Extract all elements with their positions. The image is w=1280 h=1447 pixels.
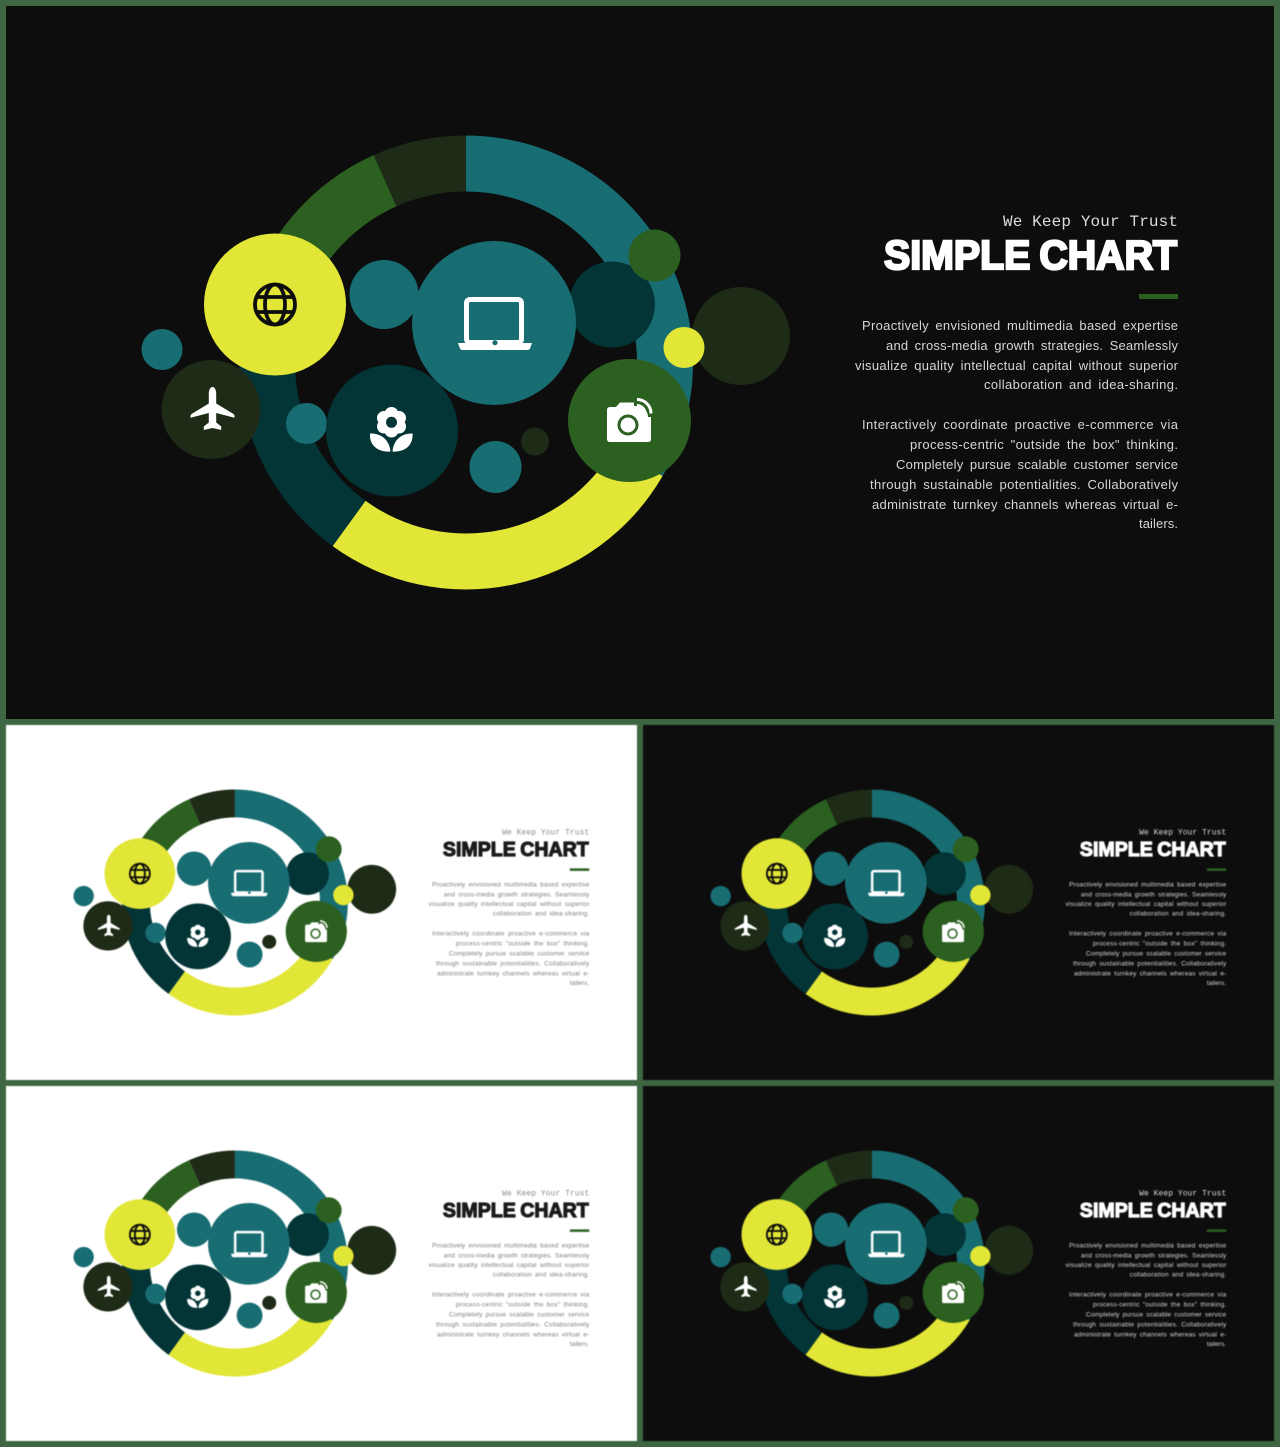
paragraph 1: visualize quality intellectual capital without superior xyxy=(1065,1262,1227,1269)
paragraph 2: process-centric "outside the box" thinking. xyxy=(1093,1302,1226,1309)
paragraph 2: Interactively coordinate proactive e-commerce via xyxy=(1069,1292,1227,1299)
paragraph 1: and cross-media growth strategies. Seamlessly xyxy=(444,1252,590,1259)
paragraph 1: and cross-media growth strategies. Seamlessly xyxy=(886,338,1178,353)
paragraph 2: process-centric "outside the box" thinking. xyxy=(910,437,1178,452)
paragraph 2: Interactively coordinate proactive e-commerce via xyxy=(1069,931,1227,938)
paragraph 1: collaboration and idea-sharing. xyxy=(1130,1272,1226,1279)
paragraph 2: tailers. xyxy=(570,1341,589,1348)
paragraph 1: collaboration and idea-sharing. xyxy=(493,911,589,918)
accent rule xyxy=(1207,1229,1226,1232)
icon: flower on dark teal circle xyxy=(165,1264,231,1330)
icon: flower on dark teal circle xyxy=(802,903,868,969)
donut ring chart xyxy=(122,789,348,1016)
decorative circle cluster xyxy=(73,1197,396,1328)
paragraph 2: Completely pursue scalable customer service xyxy=(1086,1312,1227,1319)
title: SIMPLE CHART xyxy=(1080,1200,1226,1222)
icon: camera on green circle xyxy=(923,901,984,962)
paragraph 1: Proactively envisioned multimedia based expertise xyxy=(432,881,590,888)
paragraph 1: visualize quality intellectual capital without superior xyxy=(855,358,1179,373)
paragraph 2: administrate turnkey channels whereas virtual e- xyxy=(872,497,1178,512)
subtitle: We Keep Your Trust xyxy=(1139,829,1226,838)
paragraph 2: administrate turnkey channels whereas virtual e- xyxy=(437,970,589,977)
paragraph 2: administrate turnkey channels whereas virtual e- xyxy=(1074,970,1226,977)
paragraph 2: process-centric "outside the box" thinking. xyxy=(456,1302,589,1309)
paragraph 1: and cross-media growth strategies. Seamlessly xyxy=(1081,891,1227,898)
paragraph 2 xyxy=(1069,931,1227,987)
icon: camera on green circle xyxy=(286,901,347,962)
title: SIMPLE CHART xyxy=(443,1200,589,1222)
paragraph 2 xyxy=(1069,1292,1227,1348)
subtitle: We Keep Your Trust xyxy=(1139,1190,1226,1199)
decorative circle cluster xyxy=(73,836,396,967)
icon: globe on yellow circle xyxy=(105,1199,175,1270)
icon: plane on dark circle xyxy=(720,901,770,951)
paragraph 1: collaboration and idea-sharing. xyxy=(493,1272,589,1279)
title: SIMPLE CHART xyxy=(443,839,589,861)
paragraph 1: and cross-media growth strategies. Seamlessly xyxy=(444,891,590,898)
icon: laptop on teal circle xyxy=(845,1203,927,1285)
paragraph 2: Interactively coordinate proactive e-commerce via xyxy=(432,931,590,938)
icon: camera on green circle xyxy=(286,1262,347,1323)
paragraph 2 xyxy=(432,1292,590,1348)
subtitle: We Keep Your Trust xyxy=(1003,213,1178,231)
paragraph 2: tailers. xyxy=(1139,516,1178,531)
paragraph 1 xyxy=(428,1242,590,1279)
slide 4: small white chart, bottom row xyxy=(6,1086,637,1441)
paragraph 2: process-centric "outside the box" thinking. xyxy=(456,941,589,948)
paragraph 2: tailers. xyxy=(570,980,589,987)
paragraph 2: process-centric "outside the box" thinking. xyxy=(1093,941,1226,948)
paragraph 1 xyxy=(1065,881,1227,918)
paragraph 2: through sustainable potentialities. Collaboratively xyxy=(1073,1321,1227,1328)
paragraph 2: administrate turnkey channels whereas virtual e- xyxy=(437,1331,589,1338)
paragraph 2: through sustainable potentialities. Collaboratively xyxy=(436,1321,590,1328)
accent rule xyxy=(570,868,589,871)
donut ring chart xyxy=(759,789,985,1016)
decorative circle cluster xyxy=(142,230,790,493)
title: SIMPLE CHART xyxy=(1080,839,1226,861)
paragraph 1 xyxy=(1065,1242,1227,1279)
paragraph 1: visualize quality intellectual capital without superior xyxy=(1065,901,1227,908)
paragraph 1 xyxy=(855,318,1179,392)
slide 3: small dark chart, middle row xyxy=(643,725,1274,1080)
paragraph 2: through sustainable potentialities. Collaboratively xyxy=(1073,960,1227,967)
icon: plane on dark circle xyxy=(83,1262,133,1312)
paragraph 2 xyxy=(862,417,1179,531)
paragraph 2 xyxy=(432,931,590,987)
accent rule xyxy=(570,1229,589,1232)
title: SIMPLE CHART xyxy=(884,232,1177,278)
paragraph 2: tailers. xyxy=(1207,1341,1226,1348)
icon: globe on yellow circle xyxy=(742,838,812,909)
paragraph 1: Proactively envisioned multimedia based expertise xyxy=(1069,1242,1227,1249)
donut ring chart xyxy=(239,136,693,589)
paragraph 2: Completely pursue scalable customer service xyxy=(449,951,590,958)
paragraph 2: Interactively coordinate proactive e-commerce via xyxy=(432,1292,590,1299)
icon: laptop on teal circle xyxy=(412,241,576,405)
paragraph 2: Interactively coordinate proactive e-commerce via xyxy=(862,417,1179,432)
decorative circle cluster xyxy=(710,1197,1033,1328)
donut ring chart xyxy=(759,1150,985,1377)
donut ring chart xyxy=(122,1150,348,1377)
icon: camera on green circle xyxy=(568,359,691,482)
icon: laptop on teal circle xyxy=(208,1203,290,1285)
paragraph 1: visualize quality intellectual capital without superior xyxy=(428,1262,590,1269)
paragraph 1: collaboration and idea-sharing. xyxy=(984,377,1178,392)
paragraph 1: Proactively envisioned multimedia based expertise xyxy=(1069,881,1227,888)
paragraph 1: Proactively envisioned multimedia based expertise xyxy=(862,318,1178,333)
slide 5: small dark chart, bottom row xyxy=(643,1086,1274,1441)
icon: globe on yellow circle xyxy=(105,838,175,909)
slide 1: large dark chart xyxy=(6,6,1274,719)
icon: flower on dark teal circle xyxy=(326,364,458,496)
paragraph 1: visualize quality intellectual capital without superior xyxy=(428,901,590,908)
paragraph 2: Completely pursue scalable customer service xyxy=(449,1312,590,1319)
icon: globe on yellow circle xyxy=(204,234,346,376)
icon: plane on dark circle xyxy=(162,360,260,459)
paragraph 2: Completely pursue scalable customer service xyxy=(1086,951,1227,958)
subtitle: We Keep Your Trust xyxy=(502,1190,589,1199)
accent rule xyxy=(1207,868,1226,871)
paragraph 1: and cross-media growth strategies. Seamlessly xyxy=(1081,1252,1227,1259)
accent rule xyxy=(1139,294,1178,299)
icon: plane on dark circle xyxy=(720,1262,770,1312)
icon: flower on dark teal circle xyxy=(165,903,231,969)
paragraph 1: Proactively envisioned multimedia based expertise xyxy=(432,1242,590,1249)
icon: flower on dark teal circle xyxy=(802,1264,868,1330)
paragraph 2: tailers. xyxy=(1207,980,1226,987)
subtitle: We Keep Your Trust xyxy=(502,829,589,838)
decorative circle cluster xyxy=(710,836,1033,967)
paragraph 1 xyxy=(428,881,590,918)
icon: globe on yellow circle xyxy=(742,1199,812,1270)
icon: camera on green circle xyxy=(923,1262,984,1323)
slide 2: small white chart, middle row xyxy=(6,725,637,1080)
icon: laptop on teal circle xyxy=(208,842,290,924)
paragraph 2: through sustainable potentialities. Collaboratively xyxy=(436,960,590,967)
icon: laptop on teal circle xyxy=(845,842,927,924)
paragraph 2: administrate turnkey channels whereas virtual e- xyxy=(1074,1331,1226,1338)
icon: plane on dark circle xyxy=(83,901,133,951)
paragraph 2: Completely pursue scalable customer service xyxy=(896,457,1178,472)
paragraph 1: collaboration and idea-sharing. xyxy=(1130,911,1226,918)
paragraph 2: through sustainable potentialities. Collaboratively xyxy=(870,477,1178,492)
